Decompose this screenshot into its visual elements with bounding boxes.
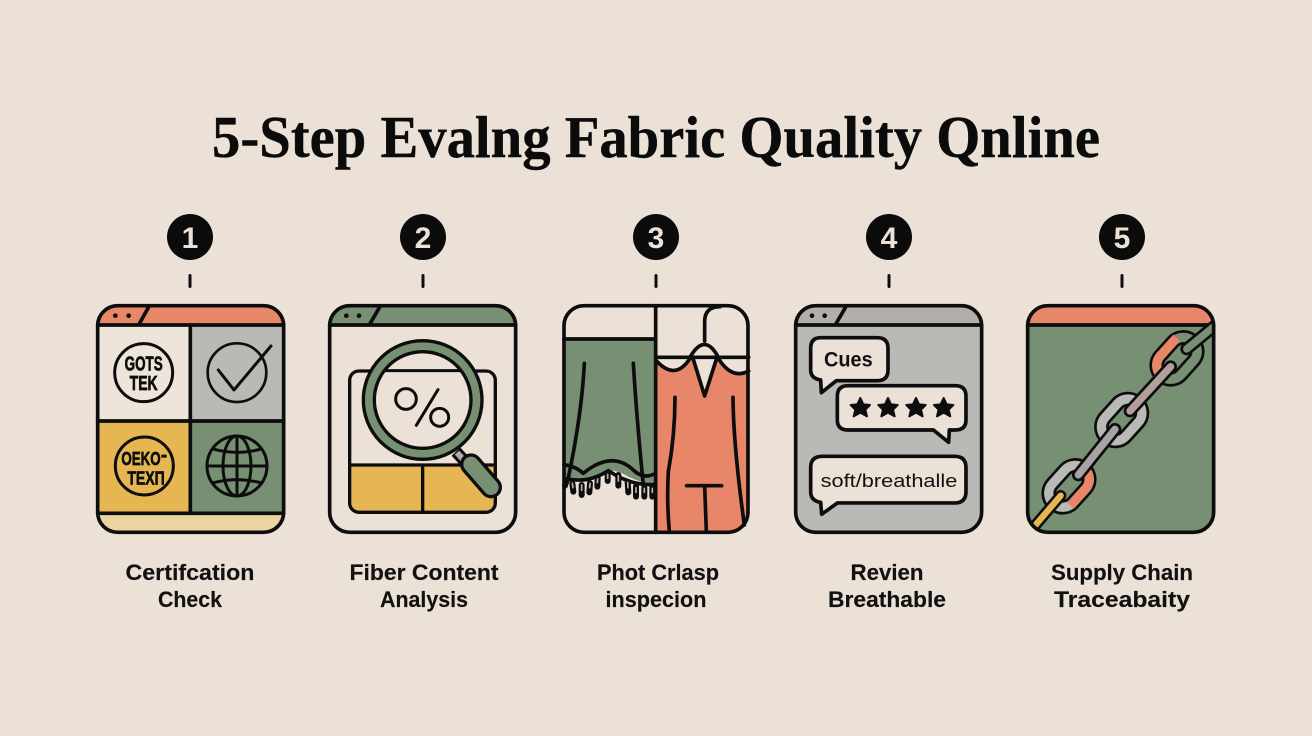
step 2 connector — [422, 274, 424, 288]
connecting bars — [1130, 367, 1171, 411]
title: 5-Step Evalng Fabric Quality Qnline — [212, 104, 1100, 170]
panel: review breathable — [796, 306, 982, 532]
star icons — [851, 398, 953, 416]
label: step 1: Check — [158, 587, 223, 612]
speech bubble: soft/breathalle — [811, 456, 966, 514]
icon: check mark — [208, 343, 271, 402]
percent glyph — [396, 389, 449, 426]
step 2 number badge: 2 — [415, 222, 431, 255]
fabric swatch chart — [350, 371, 495, 512]
top link — [1151, 332, 1203, 385]
green garment — [564, 339, 656, 485]
badge: OEKO-TEX: OEKO — [121, 448, 161, 469]
middle link — [1096, 393, 1148, 447]
icon: globe — [207, 436, 267, 496]
step 4 connector — [888, 274, 890, 288]
label: step 5: Supply Chain — [1051, 560, 1193, 585]
icon: chain — [1035, 326, 1215, 526]
panel: certification check — [98, 306, 284, 533]
step 4 number badge — [866, 214, 912, 260]
speech bubble: soft/breathalle: soft/breathalle — [821, 470, 957, 491]
icon: magnifying glass — [363, 341, 491, 487]
panel: fiber content analysis — [330, 306, 516, 532]
step 1 number badge — [167, 214, 213, 260]
step 2 number badge — [400, 214, 446, 260]
step 5 connector — [1120, 274, 1124, 288]
badge: GOTS TEK — [115, 344, 173, 402]
badge: GOTS TEK: TEK — [130, 373, 158, 395]
step 3 connector — [654, 274, 658, 288]
step 4 number badge: 4 — [881, 222, 898, 255]
badge: OEKO-TEX — [115, 437, 173, 495]
coral garment — [656, 358, 749, 532]
step 3 number badge — [633, 214, 679, 260]
speech bubble: Cues — [811, 338, 888, 393]
panel: photo inspection — [564, 306, 749, 532]
bottom link — [1043, 460, 1095, 513]
speech bubble: star rating — [837, 386, 966, 442]
fringe — [565, 474, 652, 497]
label: step 4: Breathable — [828, 587, 946, 612]
label: step 4: Revien — [850, 560, 924, 585]
panel: supply chain traceability — [1028, 306, 1215, 532]
speech bubble: Cues: Cues — [824, 347, 873, 371]
label: step 3: inspecion — [606, 587, 706, 612]
badge: OEKO-TEX: TEXП — [127, 467, 165, 488]
step 5 number badge — [1099, 214, 1145, 260]
label: step 3: Phot Crlasp — [597, 560, 719, 585]
label: step 2: Analysis — [380, 587, 468, 612]
label: step 1: Certifcation — [126, 560, 254, 585]
step 5 number badge: 5 — [1114, 222, 1130, 255]
step 3 number badge: 3 — [648, 222, 664, 255]
badge: GOTS TEK: GOTS — [125, 353, 163, 375]
step 1 number badge: 1 — [182, 222, 198, 255]
label: step 2: Fiber Content — [350, 560, 499, 585]
label: step 5: Traceabaity — [1054, 587, 1191, 612]
step 1 connector — [188, 274, 192, 288]
